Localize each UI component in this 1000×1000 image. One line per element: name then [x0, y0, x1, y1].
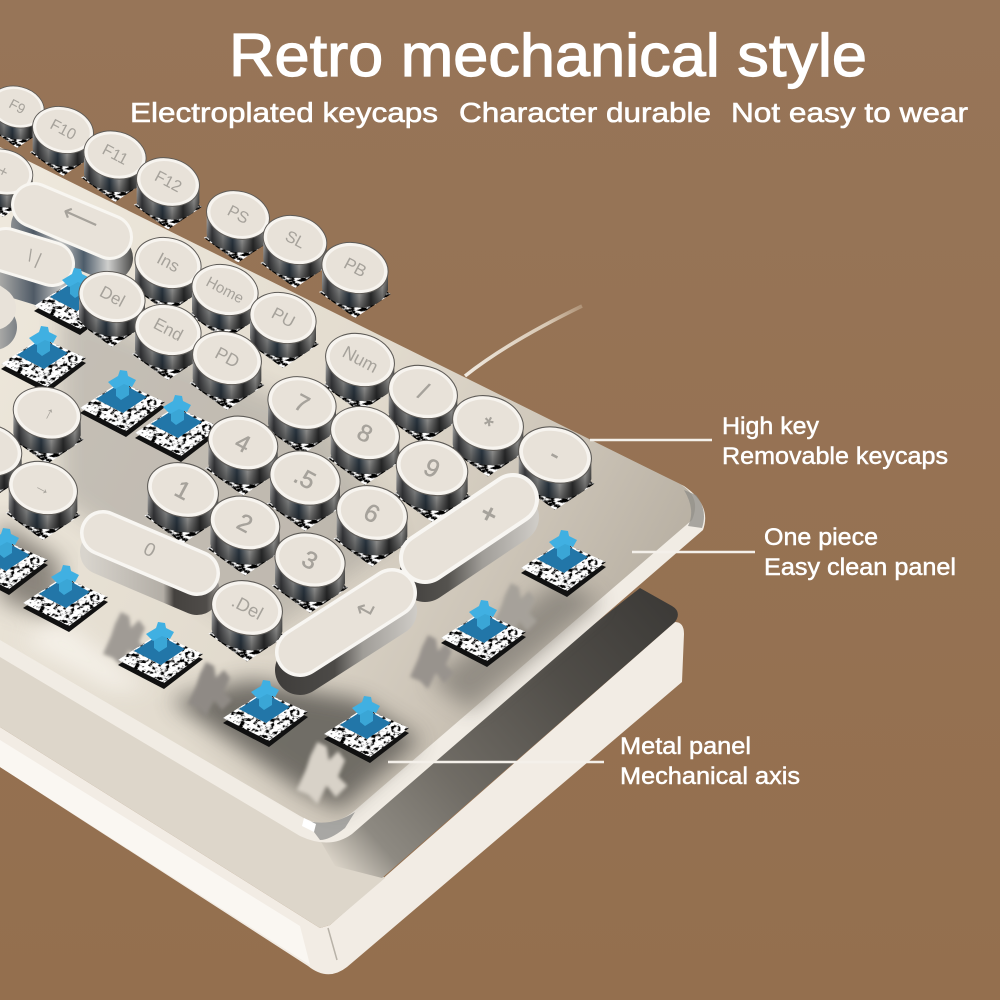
key PD: PD: [212, 343, 243, 372]
key 9: 9: [419, 454, 444, 484]
key 1: [142, 455, 224, 544]
key 2: [205, 489, 285, 576]
key 9: [390, 433, 474, 522]
key SL: SL: [282, 227, 308, 252]
enter key: ↵: [350, 594, 382, 628]
zero key: [103, 533, 197, 592]
key 5: .5: [289, 462, 320, 496]
key 4: [203, 409, 283, 496]
function key F11: F11: [99, 141, 131, 169]
backspace key: ⟵: [58, 196, 104, 238]
panel shading: [0, 300, 600, 810]
key PS: PS: [224, 202, 252, 228]
callout: one piece, easy clean panel: Easy clean panel: [764, 554, 956, 581]
backspace key: [34, 196, 110, 258]
key 5: [264, 444, 346, 531]
callout: metal panel, mechanical axis: Metal panel: [620, 733, 751, 760]
key Num: Num: [339, 342, 382, 377]
key Del: [73, 265, 151, 347]
key Ins: Ins: [154, 249, 183, 276]
key 7: 7: [289, 390, 313, 419]
backslash key: \ |: [24, 246, 44, 269]
key Home: [186, 258, 264, 340]
key .Del: [206, 573, 288, 662]
switch blue stem 2: [80, 370, 165, 437]
callout: metal panel, mechanical axis: [620, 733, 800, 790]
subtitle: not easy to wear: Not easy to wear: [731, 97, 968, 128]
key .Del: .Del: [228, 591, 266, 624]
key right arrow: →: [31, 474, 56, 500]
subtitle: electroplated keycaps: Electroplated keycaps: [130, 97, 438, 128]
key PU: [244, 286, 322, 368]
key 8: 8: [352, 419, 377, 449]
partial key at left edge: [0, 417, 27, 501]
callout line: one piece: [632, 551, 755, 553]
function key F9: F9: [6, 95, 29, 117]
key asterisk: [447, 388, 529, 476]
switch blue stem 10: [324, 696, 409, 763]
switch blue stem 3: [135, 395, 220, 462]
key PU: PU: [268, 304, 298, 331]
key End: End: [150, 314, 186, 345]
key Home: Home: [203, 274, 246, 307]
key 8: [325, 399, 405, 485]
function key F9: [0, 80, 49, 148]
plus key: [425, 497, 513, 576]
callout: high key, removable keycaps: High key: [722, 413, 819, 440]
callout: high key, removable keycaps: [722, 413, 948, 470]
keyboard top panel: [0, 147, 705, 843]
enter key: [300, 593, 392, 670]
key 4: 4: [230, 429, 255, 459]
switch blue stem 8: [118, 622, 203, 689]
keyboard base: [0, 588, 684, 974]
function key F10: [28, 100, 98, 176]
zero key: 0: [140, 539, 159, 562]
key slash: /: [414, 378, 433, 405]
key PS: [201, 184, 275, 262]
callout: high key, removable keycaps: Removable keycaps: [722, 443, 948, 470]
plus key: +: [475, 497, 503, 531]
switch blue stem 6: [23, 565, 108, 632]
exposed plate posts: [103, 583, 537, 804]
subtitle: character durable: Character durable: [459, 97, 711, 128]
backslash key: [6, 246, 52, 286]
key up arrow: [8, 380, 86, 464]
key right arrow: [3, 454, 83, 540]
switch blue stem 1: [1, 326, 86, 393]
key PB: [316, 236, 394, 318]
key Num: [320, 326, 400, 412]
switch blue stem 4: [521, 530, 606, 597]
key PD: [187, 324, 267, 410]
key slash: [383, 358, 463, 444]
switch blue stem 7: [441, 600, 526, 667]
key 7: [262, 370, 342, 454]
switch behind Del: [34, 268, 119, 335]
key End: [129, 298, 207, 380]
key minus: [513, 419, 597, 510]
key PB: PB: [341, 254, 370, 281]
function key F10: F10: [47, 116, 79, 144]
key 6: 6: [359, 499, 384, 529]
key 2: 2: [232, 509, 257, 539]
switch blue stem 5: [0, 528, 48, 595]
switch blue stem 9: [223, 680, 308, 747]
function key F11: [79, 125, 151, 202]
usb cable: [465, 306, 582, 376]
key minus: -: [545, 440, 565, 469]
key SL: [258, 209, 332, 288]
key Ins: [129, 231, 207, 313]
key plus, cropped: [0, 143, 38, 217]
callout: one piece, easy clean panel: One piece: [764, 524, 878, 551]
callout: one piece, easy clean panel: [764, 524, 956, 581]
function key F12: [131, 151, 205, 230]
key up arrow: →: [33, 400, 59, 425]
title: Retro mechanical style: [229, 22, 867, 89]
callout: metal panel, mechanical axis: Mechanical axis: [620, 763, 800, 790]
callout line: metal panel: [388, 761, 604, 763]
function key F12: F12: [152, 167, 185, 196]
callout line: high key: [590, 439, 712, 441]
key 3: 3: [297, 546, 322, 576]
key 6: [331, 478, 413, 566]
key 3: [269, 526, 351, 613]
key 1: 1: [170, 476, 195, 506]
key asterisk: *: [476, 412, 497, 440]
key Del: Del: [97, 282, 128, 311]
